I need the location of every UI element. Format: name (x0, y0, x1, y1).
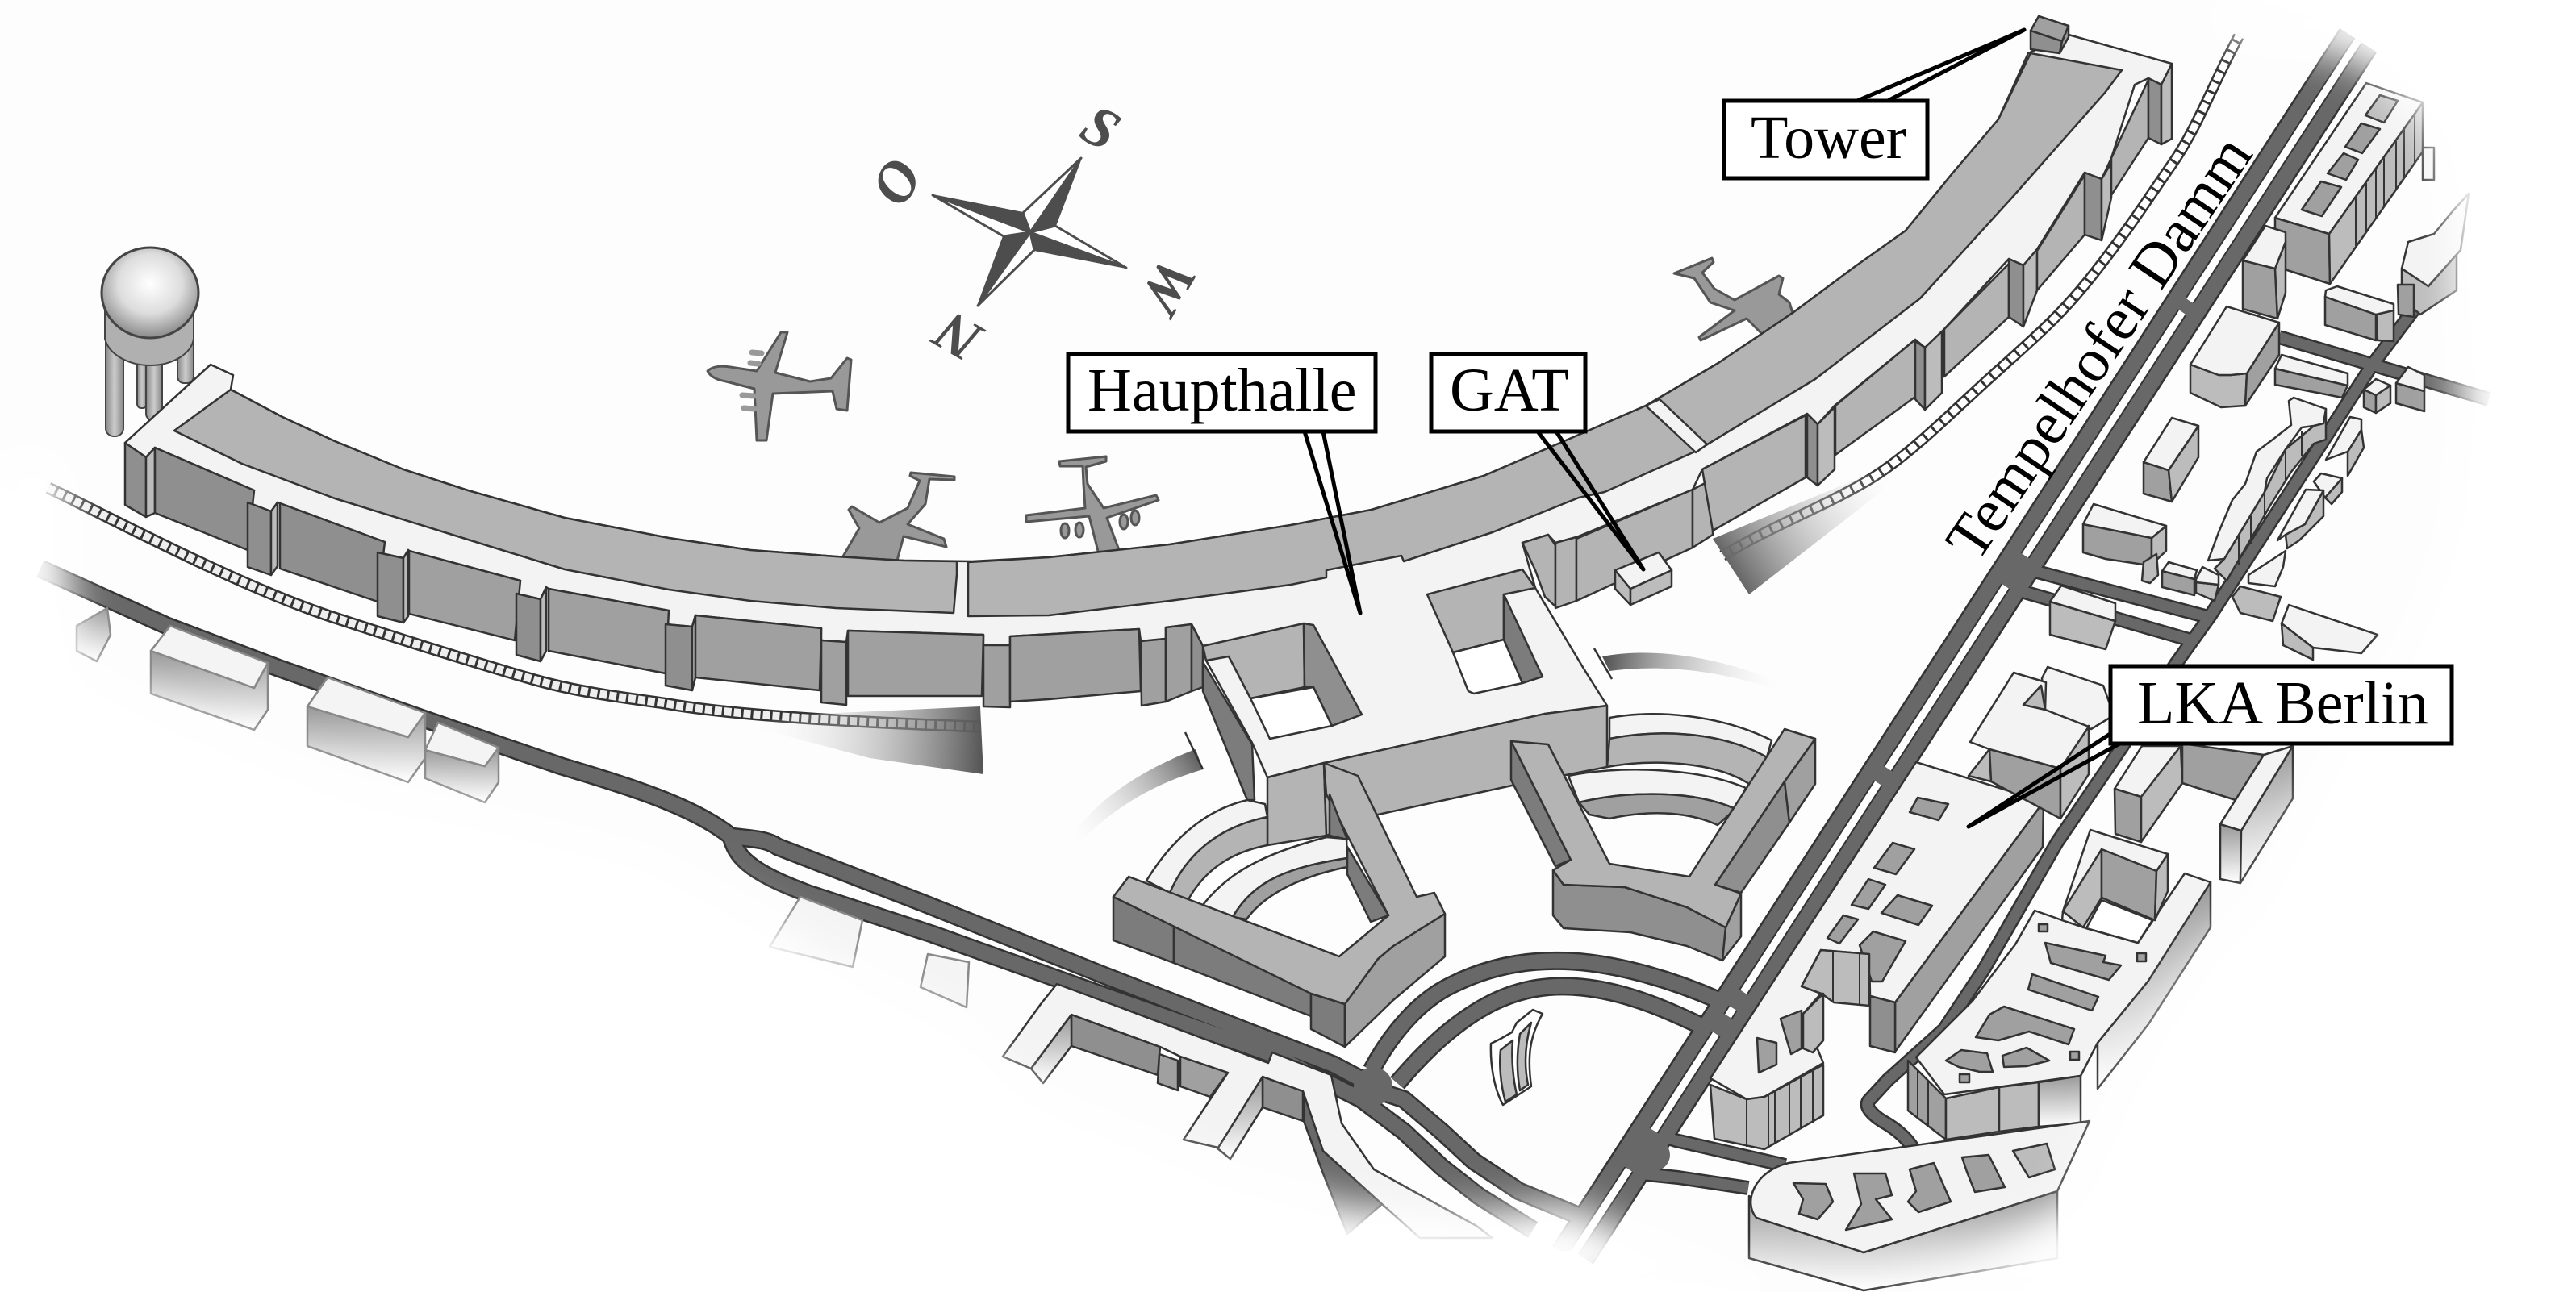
terminal walls west (125, 443, 1203, 707)
monument sculpture (1491, 1010, 1543, 1105)
callout: GAT: GAT (1450, 356, 1569, 424)
LKA Berlin complex (1710, 762, 2044, 1149)
block B: tower (2243, 260, 2277, 319)
block H (2115, 746, 2186, 797)
row of small blocks (2162, 571, 2194, 595)
LKA south tower (1803, 994, 1823, 1052)
callout: LKA Berlin: LKA Berlin (2137, 669, 2428, 737)
west wing outer wall (1203, 662, 1255, 800)
callout: Haupthalle (1068, 354, 1376, 613)
block K courtyards (2045, 943, 2121, 980)
compass letter N: N (921, 297, 993, 375)
compass letter S: S (1071, 91, 1131, 164)
railway track: left (48, 488, 980, 727)
terminal walls east (1522, 64, 2172, 608)
roof band east (968, 53, 2122, 616)
compass letter W: W (1126, 248, 1210, 328)
block A: long north block (2275, 218, 2330, 284)
block I courtyard (2062, 830, 2168, 943)
airplane 1 (708, 332, 851, 440)
block behind LKA (2042, 667, 2114, 729)
courtyard west (1203, 623, 1305, 698)
arc shadow left (1067, 732, 1203, 848)
callout: LKA Berlin (1969, 666, 2452, 827)
block south of road (1003, 984, 1493, 1238)
street label: Tempelhofer Damm: Tempelhofer Damm (1932, 123, 2265, 572)
water tower (102, 248, 198, 436)
round block south-east (1749, 1121, 2090, 1290)
callout: Haupthalle: Haupthalle (1088, 356, 1356, 424)
compass rose (858, 91, 1210, 375)
roof expansion joint (1646, 399, 1707, 452)
south-west wing (1113, 763, 1445, 1047)
block K light roof (2098, 882, 2211, 1089)
railway track: right (1722, 36, 2239, 556)
roof band west (174, 390, 957, 613)
south-east wing (1511, 729, 1815, 961)
callout: Tower: Tower (1751, 104, 1906, 172)
airplane 3 (1026, 456, 1159, 561)
courtyard east (1427, 569, 1535, 652)
compass letter O: O (858, 148, 935, 216)
curved annex left (1146, 800, 1347, 919)
control tower block (2031, 16, 2069, 53)
block D (2325, 297, 2376, 340)
block E (2144, 462, 2172, 502)
main terminal roof (125, 35, 2172, 777)
faded row north-east (2402, 250, 2457, 315)
median strips (1571, 40, 2358, 1258)
callout: GAT (1431, 354, 1643, 569)
GAT building (1615, 552, 1672, 605)
buildings east of Tempelhofer Damm (1908, 83, 2469, 1140)
block east bottom (2050, 602, 2115, 649)
airplane 4 (1674, 258, 1793, 340)
central hall courtyards (1203, 569, 1607, 845)
LKA main wing end (1870, 996, 1895, 1052)
curved annex right (1568, 714, 1772, 825)
houses: south-west row (77, 608, 969, 1007)
shadow: right of hangar (1713, 461, 1902, 594)
block K walls (1908, 1061, 1946, 1140)
LKA courtyards (1910, 798, 1948, 820)
callout: Tower (1724, 30, 2024, 178)
cross bar front wall (1267, 763, 1326, 845)
arc shadow right (1594, 648, 1789, 694)
block along cross street (2275, 369, 2348, 398)
LKA curved court (1802, 950, 1869, 1006)
airplane 2 (841, 473, 954, 561)
block C (2190, 365, 2247, 407)
block F (2083, 524, 2152, 565)
row east of street (2348, 430, 2364, 476)
long row west of street (2215, 409, 2326, 581)
shadow: left of hangar (745, 706, 983, 774)
